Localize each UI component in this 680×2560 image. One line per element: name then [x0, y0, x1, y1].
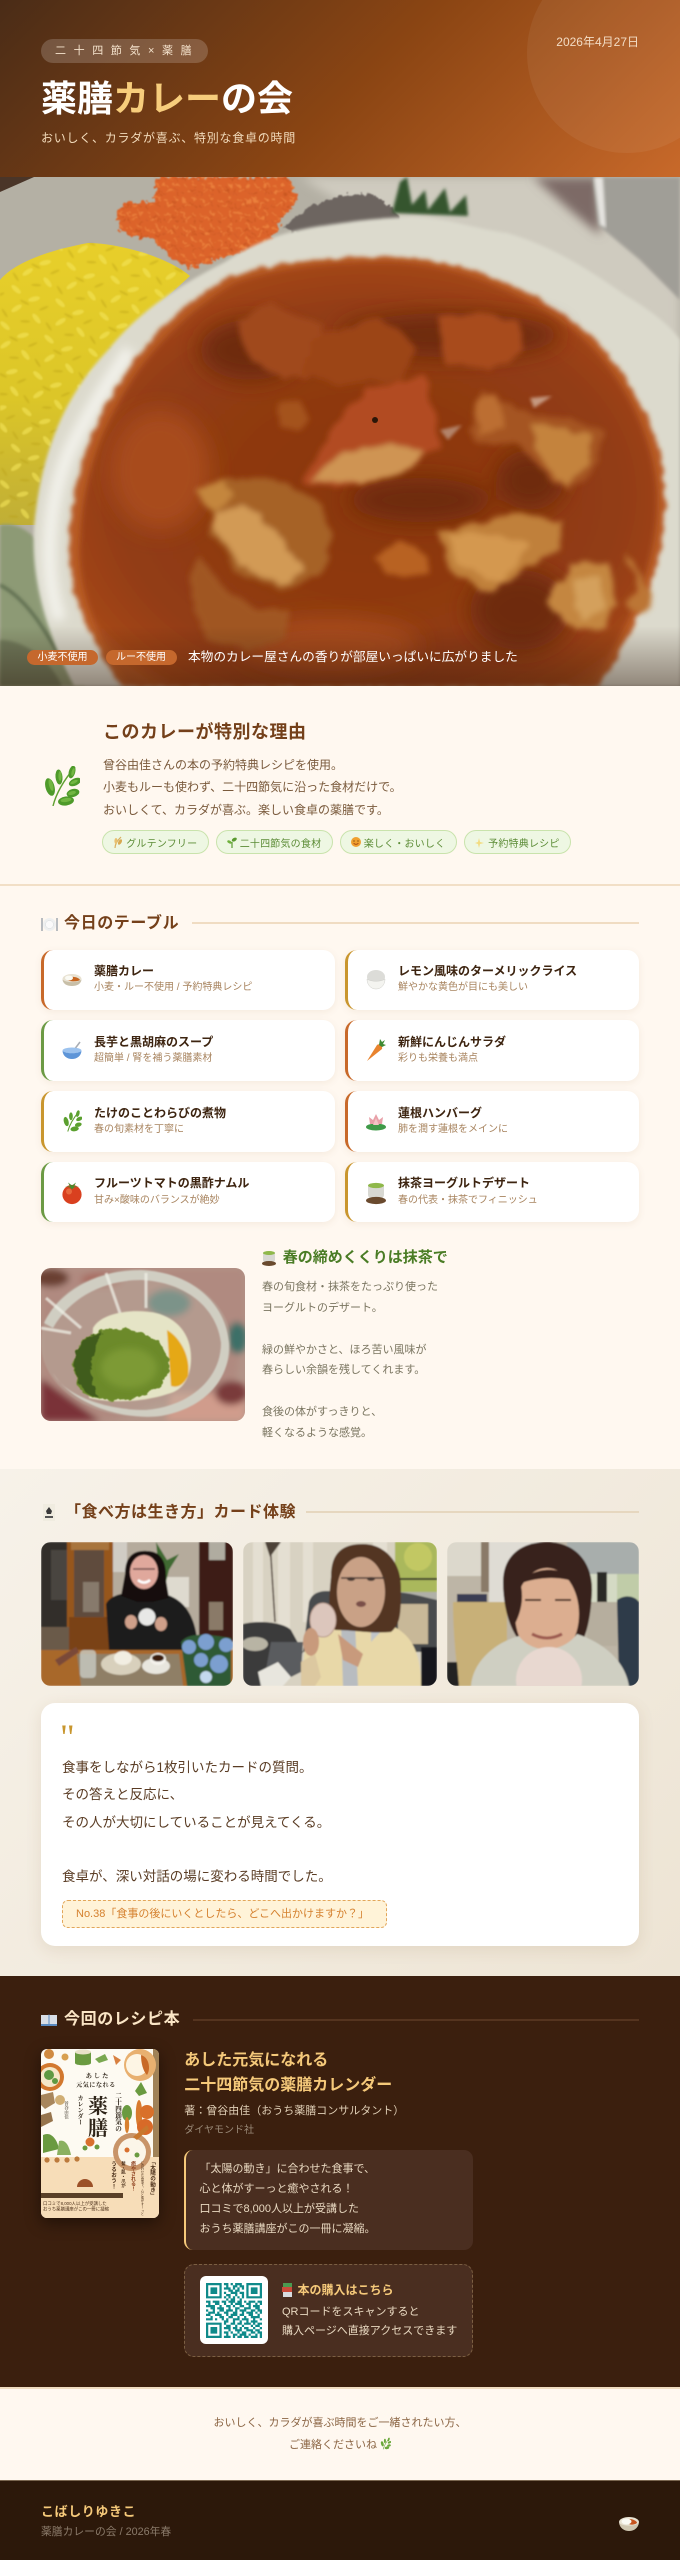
cover band text: 「太陽の動き」 — [149, 2159, 156, 2198]
cover band text — [110, 2159, 156, 2215]
icon: lotus — [366, 1114, 386, 1130]
cover title: 曽谷由佳 — [64, 2100, 70, 2120]
panel: card experience — [0, 1469, 680, 1976]
icon: sparkles — [475, 838, 484, 848]
book cover: おうち薬膳講座がこの一冊に凝縮 — [43, 2206, 109, 2212]
cover title — [64, 2072, 122, 2140]
divider — [0, 884, 680, 886]
heading text: 春の締めくくりは抹茶で — [283, 1249, 448, 1266]
item name: たけのことわらびの煮物 — [94, 1106, 226, 1120]
item name: 薬膳カレー — [94, 964, 154, 978]
item note: 鮮やかな黄色が目にも美しい — [398, 982, 528, 993]
icon: playing card — [45, 1507, 53, 1518]
icon: smile — [351, 837, 361, 847]
cover title: 膳 — [88, 2117, 108, 2140]
heading text: 「食べ方は生き方」カード体験 — [65, 1504, 296, 1520]
pill: 小麦不使用 — [27, 650, 98, 665]
cover band text: うるおう！ — [110, 2161, 117, 2189]
photo: woman holding card by window — [243, 1542, 437, 1686]
heading text: 今回のレシピ本 — [64, 2011, 180, 2028]
quote text — [62, 1760, 332, 1884]
icon: matcha cup — [262, 1251, 276, 1266]
matcha body text: 緑の鮮やかさと、ほろ苦い風味が — [262, 1344, 427, 1356]
matcha heading — [262, 1249, 448, 1266]
body text: おいしくて、カラダが喜ぶ。楽しい食卓の薬膳です。 — [103, 803, 389, 817]
quote text: 食卓が、深い対話の場に変わる時間でした。 — [62, 1869, 332, 1884]
purchase heading: 本の購入はこちら — [298, 2283, 394, 2297]
panel: recipe book — [0, 1976, 680, 2387]
footer subtitle: 薬膳カレーの会 / 2026年春 — [41, 2526, 171, 2538]
section heading — [41, 914, 639, 932]
QR code — [200, 2276, 268, 2344]
matcha body text: 春の旬食材・抹茶をたっぷり使った — [262, 1281, 438, 1293]
item name: 長芋と黒胡麻のスープ — [94, 1035, 213, 1049]
matcha body text: 食後の体がすっきりと、 — [262, 1406, 382, 1418]
tag: 二十四節気の食材 — [216, 830, 332, 854]
item note: 甘み×酸味のバランスが絶妙 — [94, 1195, 220, 1206]
book title: 二十四節気の薬膳カレンダー — [184, 2076, 392, 2094]
matcha body text: 春らしい余韻を残してくれます。 — [262, 1364, 425, 1376]
icon: plate and cutlery — [41, 918, 58, 931]
menu card: 抹茶ヨーグルトデザート — [345, 1162, 639, 1222]
book cover — [41, 2049, 159, 2218]
body text — [103, 758, 402, 817]
item name: レモン風味のターメリックライス — [398, 964, 577, 978]
pill: 小麦不使用: 小麦不使用 — [38, 652, 88, 663]
cover title: カレンダー — [76, 2095, 83, 2125]
icon: stacked books — [282, 2283, 292, 2297]
description text — [200, 2162, 376, 2235]
panel: why this curry is special — [0, 686, 680, 885]
item note: 小麦・ルー不使用 / 予約特典レシピ — [94, 982, 252, 993]
description text: 「太陽の動き」に合わせた食事で、 — [200, 2163, 375, 2175]
body text: 曾谷由佳さんの本の予約特典レシピを使用。 — [103, 758, 343, 772]
heading: このカレーが特別な理由 — [103, 722, 306, 742]
description text: 口コミで8,000人以上が受講した — [200, 2203, 359, 2215]
tag: 二十四節気の食材: 二十四節気の食材 — [240, 838, 321, 850]
cover title: 二十四節気の — [114, 2092, 122, 2132]
icon: rice bowl — [366, 970, 386, 990]
icon: curry bowl — [62, 974, 82, 986]
icon: soup bowl — [62, 1042, 82, 1059]
icon: seedling — [227, 838, 237, 848]
question chip: No.38「食事の後にいくとしたら、どこへ出かけますか？」 — [76, 1908, 369, 1920]
matcha body text: 軽くなるような感覚。 — [262, 1427, 372, 1439]
purchase text: QRコードをスキャンすると — [282, 2306, 420, 2318]
question chip — [62, 1900, 387, 1928]
closing text — [214, 2416, 466, 2451]
tag: グルテンフリー — [102, 830, 209, 854]
item note: 彩りも栄養も満点 — [398, 1053, 478, 1064]
item note: 超簡単 / 腎を補う薬膳素材 — [94, 1053, 212, 1064]
quote text: 食事をしながら1枚引いたカードの質問。 — [62, 1760, 313, 1775]
badge: 二十四節気 × 薬膳 — [41, 39, 208, 63]
item note: 肺を潤す蓮根をメインに — [398, 1124, 508, 1135]
title: 薬膳カレーの会 — [41, 78, 293, 118]
subtitle: おいしく、カラダが喜ぶ、特別な食卓の時間 — [41, 130, 296, 144]
item name: フルーツトマトの黒酢ナムル — [94, 1176, 249, 1190]
purchase text — [282, 2306, 457, 2337]
quote mark: " — [60, 1717, 75, 1757]
cover title: 元気になれる — [76, 2081, 116, 2089]
tag: 楽しく・おいしく: 楽しく・おいしく — [364, 838, 445, 850]
book title — [184, 2051, 392, 2094]
icon: tomato — [62, 1182, 82, 1204]
purchase box — [184, 2264, 473, 2357]
caption row — [27, 650, 518, 665]
cover band text: 髪・肌・爪が — [121, 2160, 126, 2189]
icon: open book — [41, 2014, 57, 2026]
heading rule — [192, 922, 639, 924]
purchase text: 購入ページへ直接アクセスできます — [282, 2325, 457, 2337]
caption text: 本物のカレー屋さんの香りが部屋いっぱいに広がりました — [188, 650, 518, 664]
menu card: 蓮根ハンバーグ — [345, 1091, 639, 1152]
heading rule — [306, 1511, 639, 1513]
menu card: 新鮮にんじんサラダ — [345, 1020, 639, 1081]
menu card: フルーツトマトの黒酢ナムル — [41, 1162, 335, 1222]
book publisher: ダイヤモンド社 — [184, 2125, 254, 2136]
cover title: 薬 — [88, 2095, 108, 2118]
menu card: 長芋と黒胡麻のスープ — [41, 1020, 335, 1081]
quote card — [41, 1703, 639, 1946]
icon: wheat — [114, 836, 122, 848]
body text: 小麦もルーも使わず、二十四節気に沿った食材だけで。 — [103, 780, 402, 794]
heading text: 今日のテーブル — [64, 915, 179, 932]
tag: 予約特典レシピ: 予約特典レシピ — [488, 838, 560, 850]
footer — [0, 2480, 680, 2560]
photo: woman with card close-up — [447, 1542, 639, 1686]
quote text: その人が大切にしていることが見えてくる。 — [62, 1814, 330, 1830]
curry illustration — [0, 177, 680, 686]
pill: ルー不使用 — [106, 650, 176, 665]
matcha body text: ヨーグルトのデザート。 — [262, 1302, 383, 1314]
menu card: たけのことわらびの煮物 — [41, 1091, 335, 1152]
footer name: こばしりゆきこ — [41, 2504, 136, 2519]
book title: あした元気になれる — [184, 2052, 328, 2069]
decorative circle — [527, 0, 680, 153]
date: 2026年4月27日 — [556, 35, 639, 49]
pill: ルー不使用: ルー不使用 — [116, 652, 166, 663]
item name: 新鮮にんじんサラダ — [398, 1035, 506, 1049]
description text: おうち薬膳講座がこの一冊に凝縮。 — [200, 2223, 376, 2235]
book description box — [184, 2150, 473, 2250]
book author: 著：曾谷由佳（おうち薬膳コンサルタント） — [184, 2104, 404, 2116]
panel: today's table — [0, 886, 680, 1469]
icon: curry bowl — [619, 2517, 639, 2531]
tag: 予約特典レシピ — [464, 830, 571, 854]
cover title: あした — [86, 2072, 110, 2080]
section heading — [45, 1503, 639, 1520]
book cover: 口コミで8,000人以上が受講した — [43, 2200, 107, 2207]
item name: 抹茶ヨーグルトデザート — [398, 1176, 530, 1190]
icon: herb — [45, 766, 80, 806]
section heading — [41, 2010, 639, 2028]
closing text: ご連絡くださいね — [289, 2439, 377, 2451]
quote text: その答えと反応に、 — [62, 1787, 183, 1802]
icon: herb — [64, 1110, 82, 1132]
panel: closing message — [0, 2387, 680, 2480]
badge: 二十四節気 × 薬膳: 二十四節気×薬膳 — [55, 45, 199, 57]
menu card: 薬膳カレー — [41, 950, 335, 1010]
matcha body text — [262, 1280, 438, 1439]
header banner — [0, 0, 680, 177]
cover band text: 癒やされる！ — [130, 2160, 136, 2191]
icon: matcha cup — [366, 1182, 386, 1204]
hero photo: curry plate — [0, 177, 680, 686]
icon: carrot — [367, 1039, 386, 1061]
cover band text: に合わせた食事で、心と体がすーっと — [140, 2161, 144, 2215]
description text: 心と体がすーっと癒やされる！ — [200, 2183, 354, 2195]
item name: 蓮根ハンバーグ — [398, 1106, 482, 1120]
tag: グルテンフリー: グルテンフリー — [126, 838, 197, 850]
closing text: おいしく、カラダが喜ぶ時間をご一緒されたい方、 — [214, 2417, 466, 2429]
menu card: レモン風味のターメリックライス — [345, 950, 639, 1010]
item note: 春の旬素材を丁寧に — [94, 1124, 184, 1135]
item note: 春の代表・抹茶でフィニッシュ — [398, 1195, 538, 1206]
photo: matcha yogurt — [41, 1268, 245, 1421]
heading rule — [192, 2018, 639, 2020]
tag: 楽しく・おいしく — [340, 830, 456, 854]
photo: woman laughing at table — [41, 1542, 233, 1686]
